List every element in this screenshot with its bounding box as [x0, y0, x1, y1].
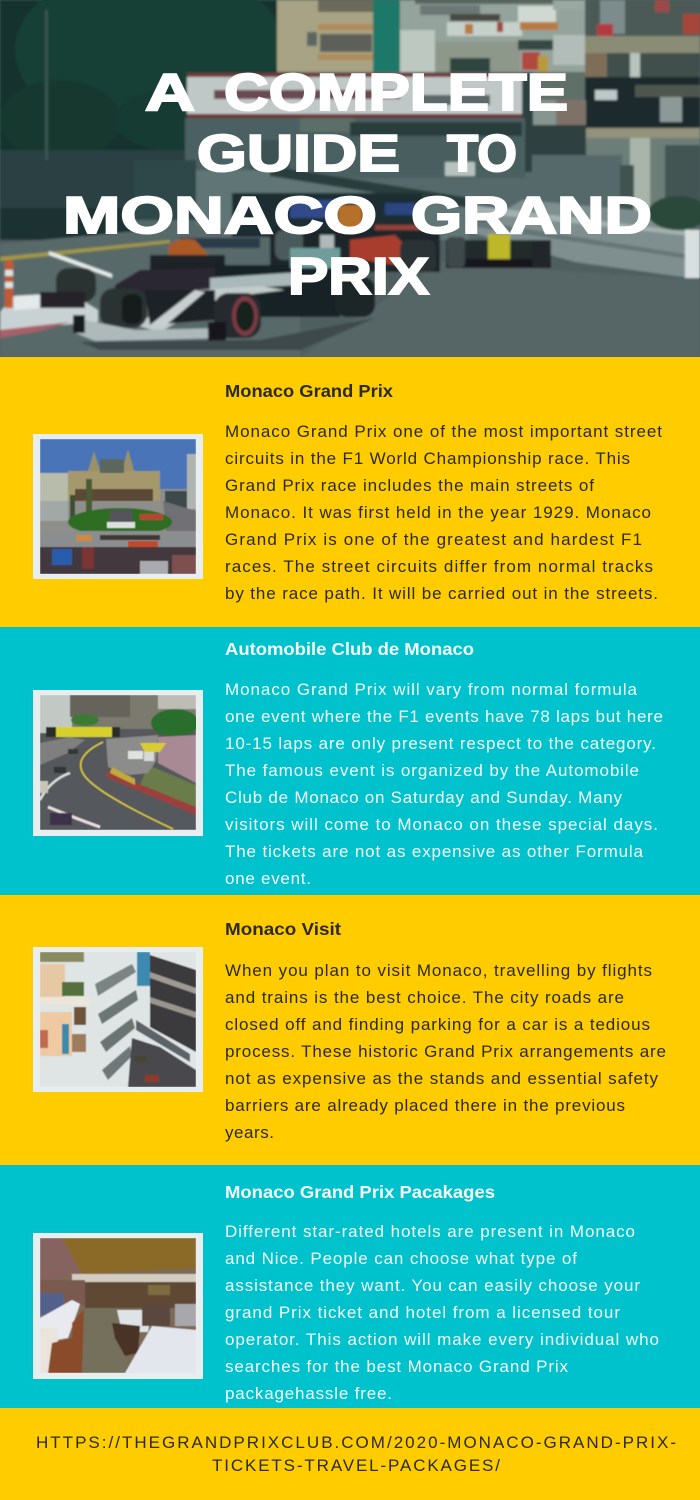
hero: race photo with title — [0, 0, 700, 357]
body text: The famous event is organized by the Automobile — [225, 761, 639, 780]
title: GRAND — [411, 187, 652, 245]
footer: source URL: HTTPS://THEGRANDPRIXCLUB.COM/2020-MONACO-GRAND-PRIX- — [36, 1433, 676, 1452]
midfield cars — [232, 193, 422, 237]
body text — [225, 680, 663, 888]
body text: closed off and finding parking for a car is a tedious — [225, 1015, 650, 1034]
body text: visitors will come to Monaco on these special days. — [225, 815, 658, 834]
body text: Monaco Grand Prix one of the most important street — [225, 422, 662, 441]
body text: years. — [225, 1123, 274, 1142]
body text: packagehassle free. — [225, 1384, 392, 1403]
body text: barriers are already placed there in the previous — [225, 1096, 625, 1115]
title: PRIX — [288, 248, 429, 306]
red bull — [180, 238, 260, 248]
under banner — [185, 118, 525, 178]
photo: casino square — [33, 434, 203, 579]
body text: one event where the F1 events have 78 laps but here — [225, 707, 663, 726]
body text — [225, 961, 666, 1142]
body text: Different star-rated hotels are present in Monaco — [225, 1222, 635, 1241]
cone and kerb — [0, 293, 98, 330]
title: A — [145, 64, 195, 122]
heading: Monaco Grand Prix Pacakages — [225, 1182, 495, 1202]
title: TO — [447, 125, 517, 183]
panel: Monaco Grand Prix — [0, 357, 700, 627]
body text: searches for the best Monaco Grand Prix — [225, 1357, 568, 1376]
banner — [187, 75, 522, 116]
body text: process. These historic Grand Prix arrangements are — [225, 1042, 666, 1061]
body text — [225, 1222, 659, 1403]
heading: Automobile Club de Monaco — [225, 639, 474, 659]
body text: Grand Prix is one of the greatest and hardest F1 — [225, 530, 642, 549]
body text: circuits in the F1 World Championship race. This — [225, 449, 630, 468]
body text: grand Prix ticket and hotel from a licensed tour — [225, 1303, 620, 1322]
body text: operator. This action will make every individual who — [225, 1330, 659, 1349]
renault — [446, 240, 551, 262]
title: COMPLETE — [224, 64, 568, 122]
footer: source URL — [0, 1408, 700, 1500]
panel: Automobile Club de Monaco — [0, 627, 700, 895]
panel: Monaco Grand Prix Pacakages — [0, 1165, 700, 1408]
title: GUIDE — [197, 125, 400, 183]
title: MONACO — [63, 187, 377, 245]
heading: Monaco Visit — [225, 919, 341, 939]
body text: and Nice. People can choose what type of — [225, 1249, 577, 1268]
body text — [225, 422, 662, 603]
title — [63, 64, 652, 306]
body text: assistance they want. You can easily choose your — [225, 1276, 640, 1295]
body text: one event. — [225, 869, 311, 888]
body text: not as expensive as the stands and essential safety — [225, 1069, 658, 1088]
footer: source URL: TICKETS-TRAVEL-PACKAGES/ — [212, 1456, 500, 1475]
hero photo — [0, 0, 700, 356]
buildings top — [277, 0, 373, 72]
body text: Monaco. It was first held in the year 1929. Monaco — [225, 503, 651, 522]
body text: The tickets are not as expensive as other Formula — [225, 842, 644, 861]
mercedes — [215, 265, 340, 317]
body text: 10-15 laps are only present respect to the category. — [225, 734, 656, 753]
body text: Grand Prix race includes the main streets of — [225, 476, 594, 495]
body text: Club de Monaco on Saturday and Sunday. Many — [225, 788, 622, 807]
body text: Monaco Grand Prix will vary from normal formula — [225, 680, 638, 699]
photo: circuit with Pirelli banner — [33, 690, 203, 836]
photo: balconies above the track — [33, 947, 203, 1092]
panel: Monaco Visit — [0, 895, 700, 1165]
heading: Monaco Grand Prix — [225, 381, 393, 401]
road — [196, 170, 470, 240]
body text: by the race path. It will be carried out in the streets. — [225, 584, 658, 603]
body text: When you plan to visit Monaco, travelling by flights — [225, 961, 652, 980]
body text: races. The street circuits differ from normal tracks — [225, 557, 653, 576]
photo: hotel restaurant — [33, 1233, 203, 1379]
body text: and trains is the best choice. The city roads are — [225, 988, 624, 1007]
